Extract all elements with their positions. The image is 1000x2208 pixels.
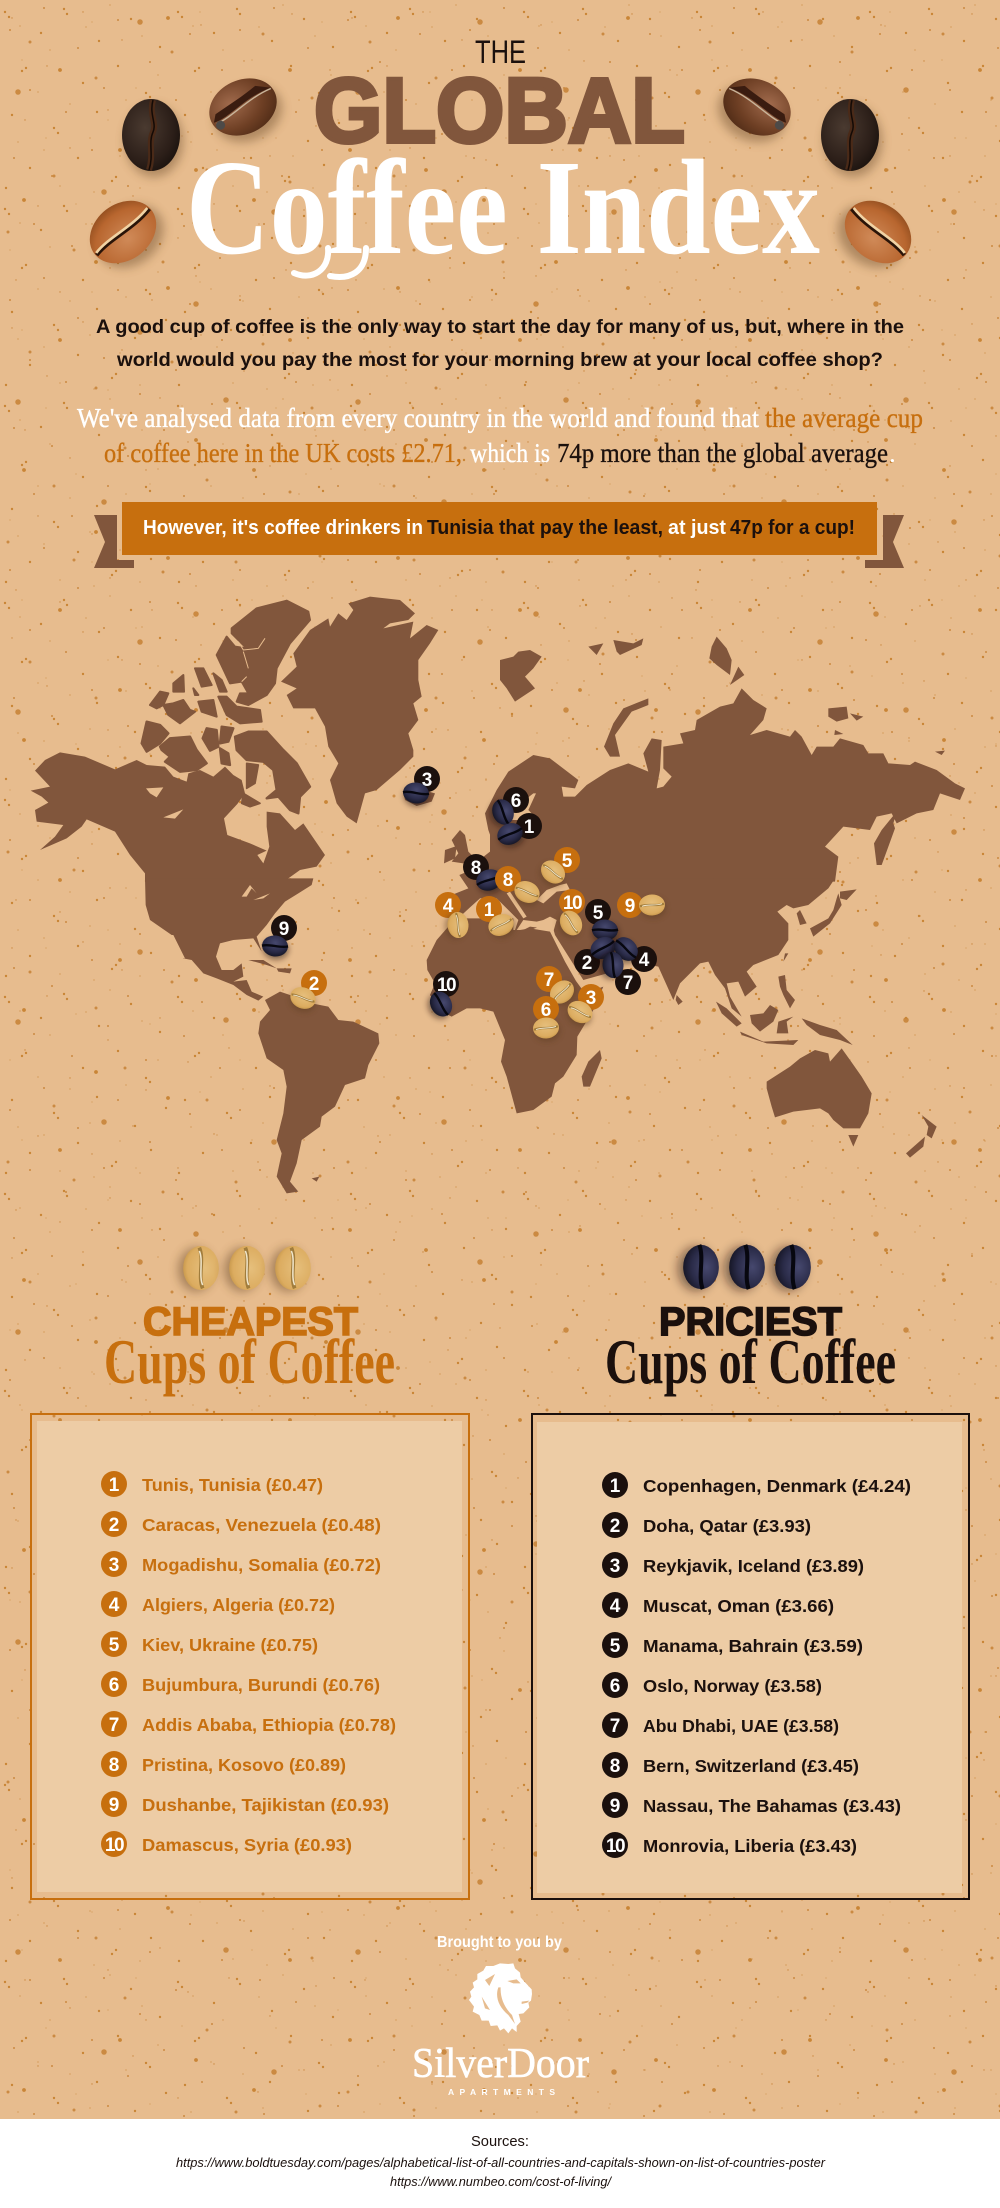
footer: sources: Sources: <box>471 2133 529 2150</box>
banner ribbon: Tunisia that pay the least, <box>427 517 663 539</box>
map: South and East Asia <box>460 878 835 1017</box>
panel: priciest list: 1 <box>610 1476 621 1497</box>
panel: cheapest list: Kiev, Ukraine (£0.75) <box>142 1635 318 1655</box>
heading: priciest: Cups of Coffee <box>605 1326 896 1397</box>
panel: priciest list <box>532 1414 969 1899</box>
icon: brown bean right <box>709 67 800 154</box>
panel: priciest list: 2 <box>610 1516 620 1537</box>
pin: priciest 4 Muscat <box>607 932 657 972</box>
icon: three dark beans <box>678 1245 811 1291</box>
pin: cheapest 3 Mogadishu: 3 <box>586 988 596 1009</box>
panel: priciest list: 10 <box>606 1836 625 1857</box>
banner ribbon: However, it's coffee drinkers in <box>143 517 423 539</box>
panel: priciest list: Manama, Bahrain (£3.59) <box>643 1636 863 1656</box>
panel: cheapest list: 9 <box>109 1795 119 1816</box>
icon: dark bean right <box>821 99 882 177</box>
logo: SilverDoor wordmark: APARTMENTS <box>448 2087 555 2097</box>
panel: priciest list: Monrovia, Liberia (£3.43) <box>643 1836 857 1856</box>
panel: priciest list: Reykjavik, Iceland (£3.89) <box>643 1556 864 1576</box>
pin: priciest 1 Copenhagen <box>494 813 542 851</box>
footer: sources: https://www.numbeo.com/cost-of-living/ <box>390 2174 612 2189</box>
title: GLOBAL <box>314 60 685 162</box>
panel: priciest list: Copenhagen, Denmark (£4.24) <box>643 1476 911 1496</box>
pin: cheapest 1 Tunis <box>476 896 519 943</box>
heading: priciest: PRICIEST <box>659 1300 842 1344</box>
banner ribbon: at just <box>668 517 726 539</box>
panel: cheapest list: 2 <box>109 1515 119 1536</box>
pin: cheapest 6 Bujumbura: 6 <box>541 1000 551 1021</box>
heading: cheapest: Cups of Coffee <box>104 1326 395 1397</box>
pin: cheapest 8 Pristina: 8 <box>503 870 513 891</box>
footer: sources <box>0 2119 1000 2208</box>
logo: lion <box>469 1963 532 2033</box>
pin: cheapest 7 Addis Ababa: 7 <box>544 970 554 991</box>
panel: priciest list: 7 <box>610 1716 620 1737</box>
pin: priciest 4 Muscat: 4 <box>639 950 650 971</box>
pin: priciest 8 Bern <box>463 854 506 897</box>
statement paragraph: which is <box>470 438 550 468</box>
pin: cheapest 8 Pristina <box>495 866 544 910</box>
heading: cheapest <box>104 1300 395 1397</box>
pin: priciest 9 Nassau: 9 <box>279 919 289 940</box>
pin: priciest 10 Monrovia: 10 <box>437 975 456 996</box>
pin: priciest 5 Manama <box>585 899 620 944</box>
title: Coffee Index <box>186 133 820 283</box>
intro paragraph: world would you pay the most for your morning brew at your local coffee shop? <box>116 350 883 371</box>
statement paragraph <box>77 403 923 468</box>
map pins: cheapest cities <box>286 847 666 1042</box>
panel: cheapest list: Tunis, Tunisia (£0.47) <box>142 1475 323 1495</box>
pin: cheapest 4 Algiers <box>435 892 470 940</box>
pin: priciest 3 Reykjavik <box>401 766 440 808</box>
statement paragraph: of coffee here in the UK costs £2.71, <box>104 438 462 468</box>
panel: cheapest list: Caracas, Venezuela (£0.48) <box>142 1515 381 1535</box>
icons: coffee beans around title <box>77 67 924 283</box>
panel: cheapest list: Damascus, Syria (£0.93) <box>142 1835 352 1855</box>
panel: priciest list: 5 <box>610 1636 621 1657</box>
panel: priciest list: Oslo, Norway (£3.58) <box>643 1676 822 1696</box>
world map <box>31 597 965 1193</box>
panel: cheapest list: 3 <box>109 1555 119 1576</box>
map pins: priciest cities <box>261 766 657 1023</box>
panel: cheapest list: Dushanbe, Tajikistan (£0.93) <box>142 1795 389 1815</box>
pin: cheapest 5 Kiev: 5 <box>562 851 573 872</box>
pin: cheapest 10 Damascus: 10 <box>563 893 582 914</box>
panel: cheapest list: 4 <box>109 1595 120 1616</box>
panel: cheapest list: Bujumbura, Burundi (£0.76) <box>142 1675 380 1695</box>
statement paragraph: . <box>889 438 896 468</box>
map: Northern Eurasia <box>480 637 965 882</box>
map: Europe <box>444 820 713 937</box>
pin: priciest 10 Monrovia <box>423 971 459 1023</box>
brought to you by: Brought to you by <box>437 1934 562 1951</box>
panel: cheapest list: 7 <box>109 1715 119 1736</box>
panel: priciest list: 4 <box>610 1596 621 1617</box>
panel: priciest list: Muscat, Oman (£3.66) <box>643 1596 834 1616</box>
icon: dark bean left <box>122 99 183 177</box>
icon: three light beans <box>178 1246 311 1292</box>
panel: cheapest list: 10 <box>105 1835 124 1856</box>
heading: cheapest: CHEAPEST <box>143 1300 358 1344</box>
pin: priciest 6 Oslo <box>486 787 529 830</box>
panel: cheapest list: 8 <box>109 1755 119 1776</box>
statement paragraph: We've analysed data from every country in the world and found that <box>77 403 759 433</box>
panel: priciest list: 9 <box>610 1796 620 1817</box>
icon: orange bean left <box>77 186 176 283</box>
statement paragraph: 74p more than the global average <box>557 438 888 468</box>
pin: cheapest 2 Caracas <box>286 970 327 1016</box>
panel: priciest list: 8 <box>610 1756 620 1777</box>
pin: priciest 7 Abu Dhabi <box>598 951 641 995</box>
footer: sources: https://www.boldtuesday.com/pages/alphabetical-list-of-all-countries-and-capitals-shown-on-list-of-countries-poster <box>176 2155 826 2170</box>
pin: cheapest 2 Caracas: 2 <box>309 974 319 995</box>
banner ribbon: 47p for a cup! <box>730 517 855 539</box>
pin: cheapest 7 Addis Ababa <box>536 966 581 1011</box>
intro paragraph <box>96 317 904 371</box>
map: Central and South America <box>145 878 379 1193</box>
statement paragraph: the average cup <box>765 403 923 433</box>
icon: orange bean right <box>825 186 924 283</box>
pin: cheapest 1 Tunis: 1 <box>484 900 495 921</box>
pin: cheapest 3 Mogadishu <box>562 984 604 1031</box>
pin: cheapest 9 Dushanbe <box>617 892 666 919</box>
panel: cheapest list: 1 <box>109 1475 120 1496</box>
pin: cheapest 10 Damascus <box>553 889 587 942</box>
pin: priciest 3 Reykjavik: 3 <box>422 770 432 791</box>
pin: priciest 2 Doha <box>574 932 622 975</box>
panel: priciest list: Doha, Qatar (£3.93) <box>643 1516 811 1536</box>
map: Africa <box>427 918 603 1113</box>
pin: cheapest 5 Kiev <box>534 847 580 891</box>
pin: priciest 9 Nassau <box>261 915 297 961</box>
icon: brown bean left <box>200 67 291 154</box>
pin: priciest 2 Doha: 2 <box>582 953 592 974</box>
pin: priciest 7 Abu Dhabi: 7 <box>623 973 633 994</box>
panel: cheapest list: 6 <box>109 1675 119 1696</box>
title <box>186 34 820 283</box>
panel: cheapest list: Algiers, Algeria (£0.72) <box>142 1595 335 1615</box>
panel: cheapest list <box>31 1414 469 1899</box>
panel: priciest list: 3 <box>610 1556 620 1577</box>
pin: priciest 8 Bern: 8 <box>471 858 481 879</box>
pin: cheapest 6 Bujumbura <box>532 996 561 1042</box>
panel: cheapest list: 5 <box>109 1635 120 1656</box>
pin: cheapest 4 Algiers: 4 <box>443 896 454 917</box>
panel: cheapest list: Addis Ababa, Ethiopia (£0.78) <box>142 1715 396 1735</box>
panel: priciest list: 6 <box>610 1676 620 1697</box>
map: Islands and Oceania <box>676 889 937 1158</box>
pin: priciest 6 Oslo: 6 <box>511 791 521 812</box>
banner ribbon <box>94 502 904 568</box>
title: THE <box>475 34 526 70</box>
pin: priciest 1 Copenhagen: 1 <box>524 817 535 838</box>
panel: priciest list: Bern, Switzerland (£3.45) <box>643 1756 859 1776</box>
panel: cheapest list: Pristina, Kosovo (£0.89) <box>142 1755 346 1775</box>
panel: priciest list: Nassau, The Bahamas (£3.43) <box>643 1796 901 1816</box>
logo: SilverDoor wordmark: SilverDoor <box>412 2041 589 2087</box>
heading: priciest <box>605 1300 896 1397</box>
intro paragraph: A good cup of coffee is the only way to start the day for many of us, but, where in the <box>96 317 904 338</box>
pin: cheapest 9 Dushanbe: 9 <box>625 896 635 917</box>
map: North America and Greenland <box>31 597 438 882</box>
panel: cheapest list: Mogadishu, Somalia (£0.72) <box>142 1555 381 1575</box>
panel: priciest list: Abu Dhabi, UAE (£3.58) <box>643 1716 839 1736</box>
pin: priciest 5 Manama: 5 <box>593 903 604 924</box>
